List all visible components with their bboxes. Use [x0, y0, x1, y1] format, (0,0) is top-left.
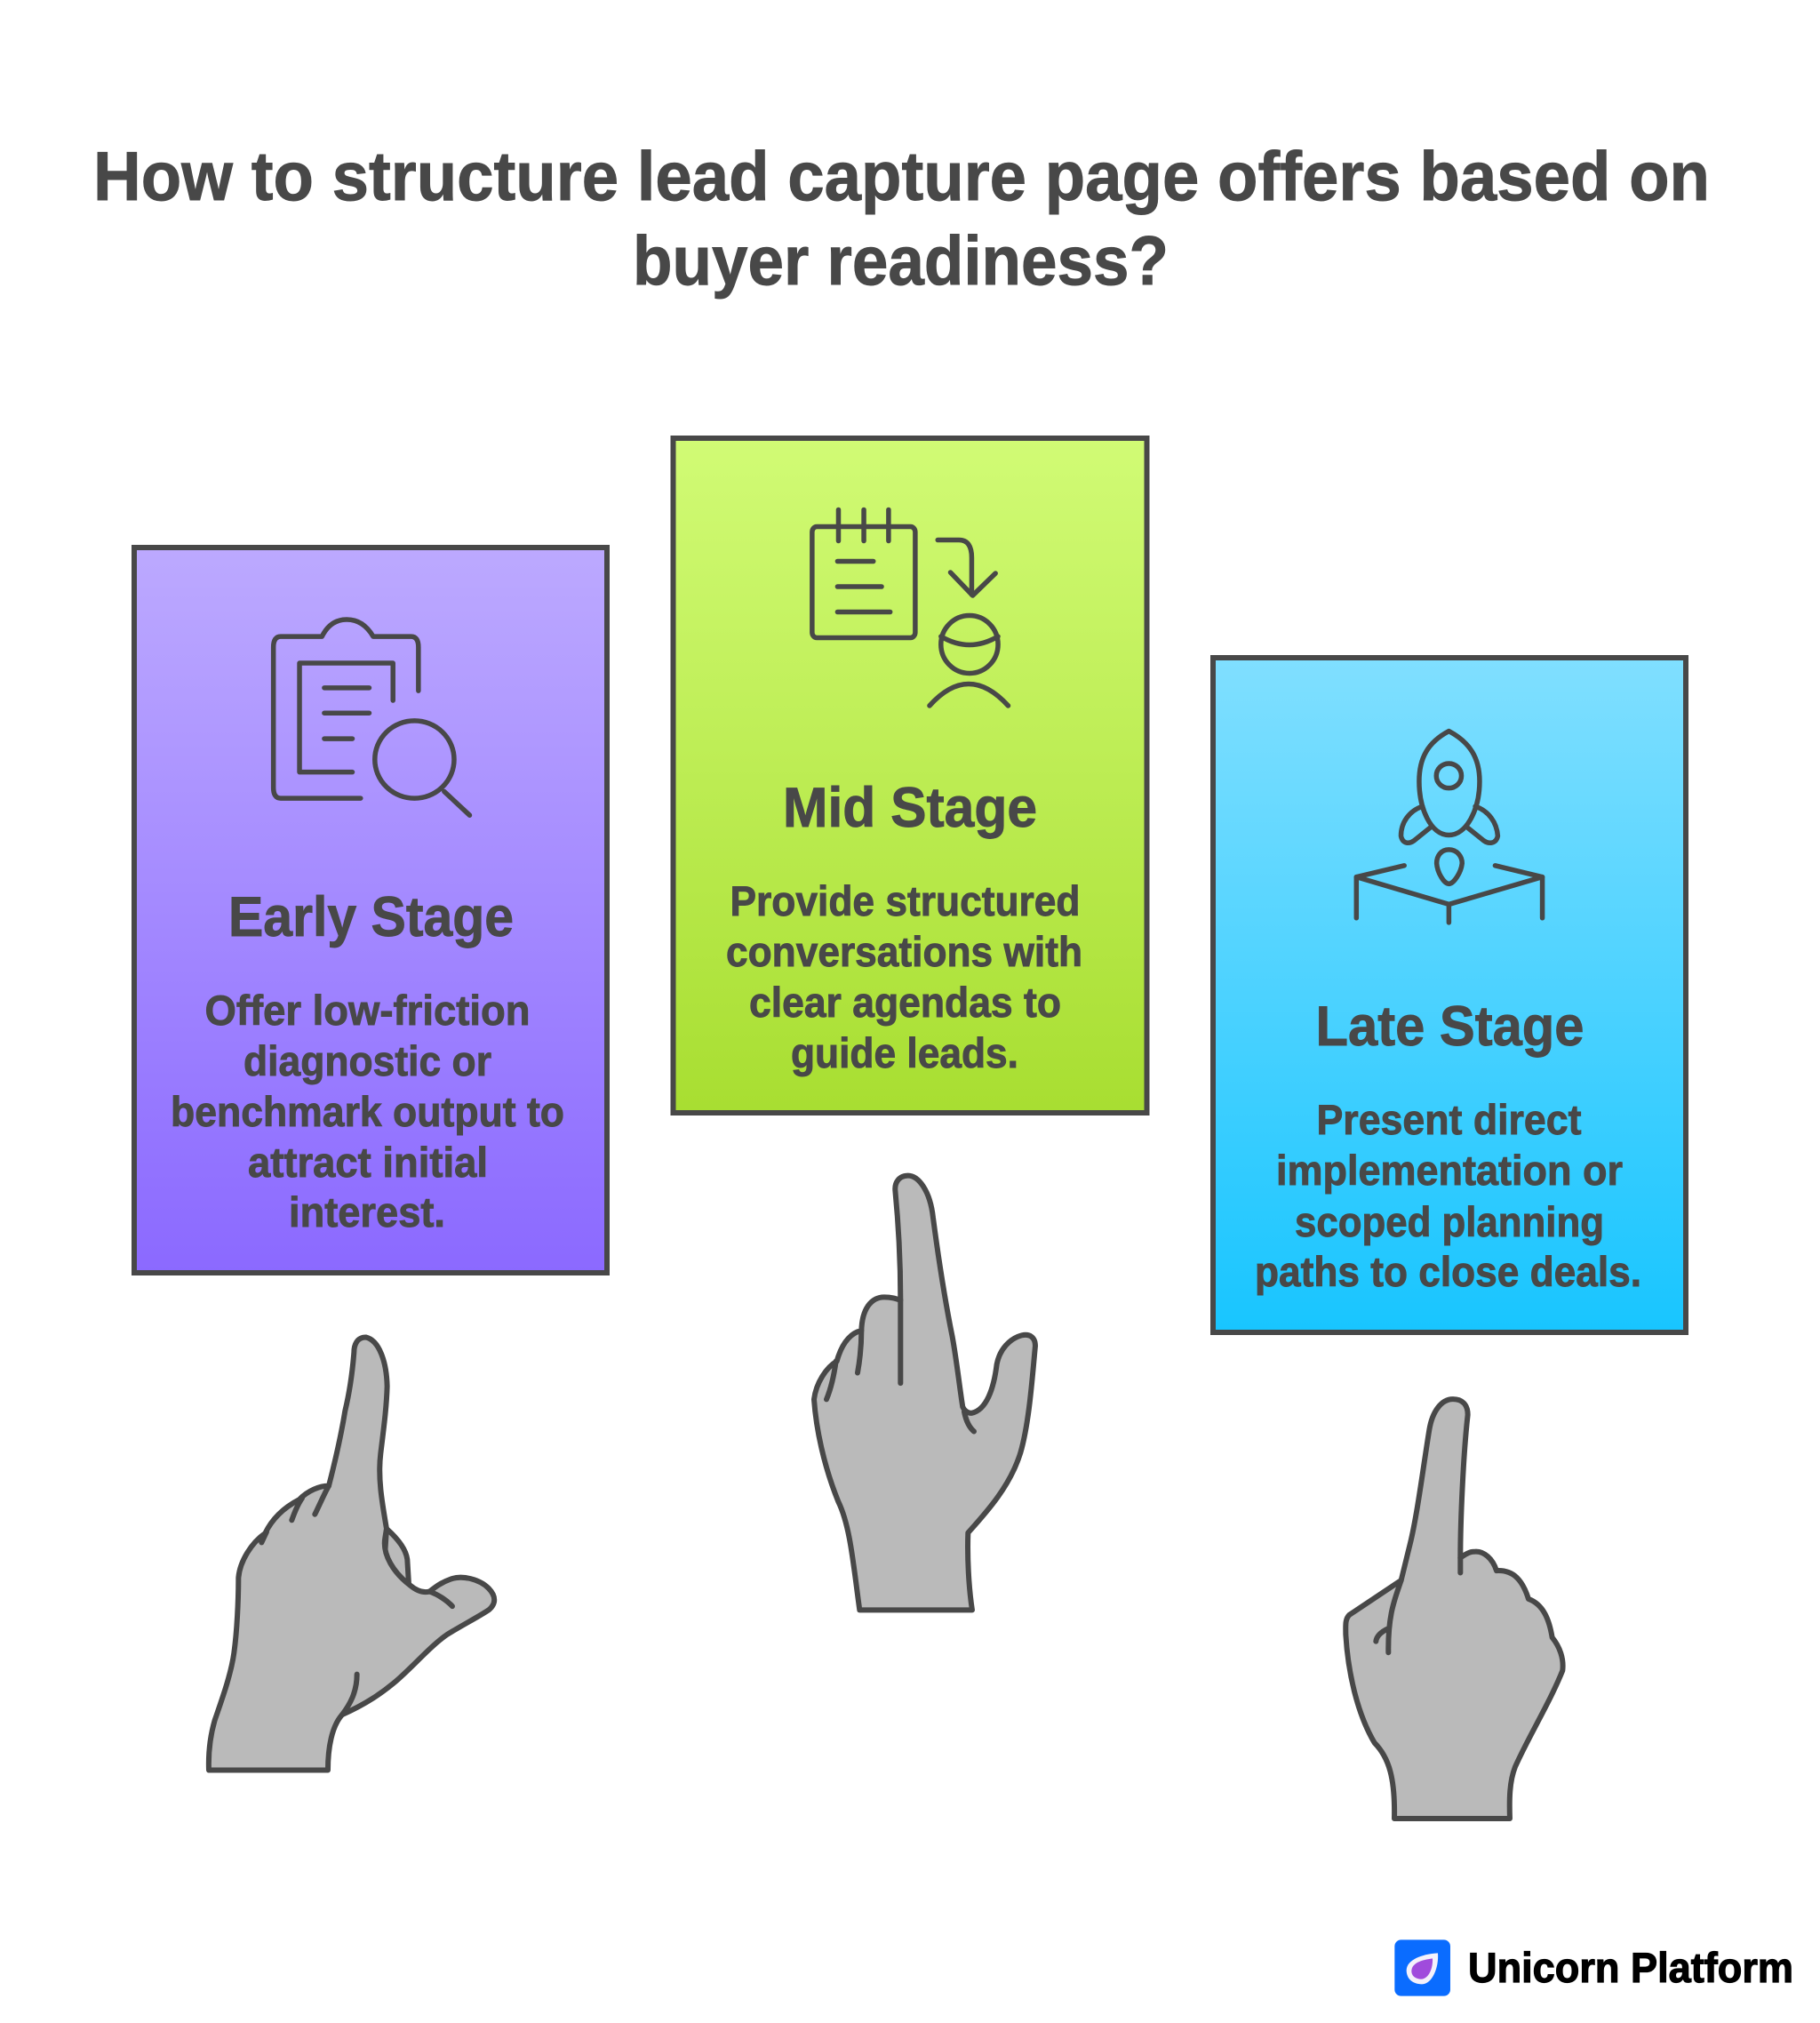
icon: clipboard with magnifying glass	[274, 620, 469, 815]
text: mid stage description: conversations with	[726, 928, 1082, 975]
card background: mid stage	[674, 438, 1146, 1113]
text: early stage description: benchmark output to	[171, 1088, 564, 1135]
title: buyer readiness?	[633, 221, 1169, 300]
logo wordmark: Unicorn Platform	[1468, 1944, 1793, 1991]
card background: early stage	[134, 548, 607, 1273]
text: early stage description	[171, 987, 564, 1235]
icon: rocket launching from platform	[1356, 732, 1543, 923]
heading: late stage: Late Stage	[1315, 996, 1584, 1058]
title	[93, 137, 1710, 300]
heading: mid stage: Mid Stage	[783, 777, 1037, 839]
title: How to structure lead capture page offers based on	[93, 137, 1710, 215]
icon: hand pointing up at mid stage	[814, 1176, 1035, 1610]
text: mid stage description: clear agendas to	[749, 979, 1061, 1026]
text: late stage description: implementation or	[1276, 1147, 1623, 1194]
panel: early stage	[134, 548, 607, 1273]
text: early stage description: attract initial	[248, 1139, 488, 1186]
text: early stage description: Offer low-friction	[204, 987, 530, 1034]
heading: early stage: Early Stage	[228, 886, 514, 948]
icon: hand pointing up at early stage	[209, 1337, 494, 1771]
panel: mid stage	[674, 438, 1146, 1113]
text: early stage description: interest.	[289, 1188, 445, 1235]
text: mid stage description	[726, 877, 1082, 1076]
text: early stage description: diagnostic or	[243, 1037, 491, 1084]
text: late stage description	[1255, 1096, 1641, 1295]
text: late stage description: scoped planning	[1295, 1198, 1604, 1245]
panel: late stage	[1213, 658, 1686, 1332]
icon: hand pointing up at late stage	[1345, 1399, 1563, 1819]
text: mid stage description: Provide structured	[730, 877, 1081, 924]
text: late stage description: Present direct	[1317, 1096, 1582, 1143]
logo: Unicorn Platform	[1394, 1939, 1793, 1996]
icon: calendar, arrow and person	[812, 510, 1008, 706]
card background: late stage	[1213, 658, 1686, 1332]
logo mark	[1394, 1939, 1450, 1996]
text: mid stage description: guide leads.	[791, 1029, 1018, 1076]
text: late stage description: paths to close deals.	[1255, 1248, 1641, 1295]
